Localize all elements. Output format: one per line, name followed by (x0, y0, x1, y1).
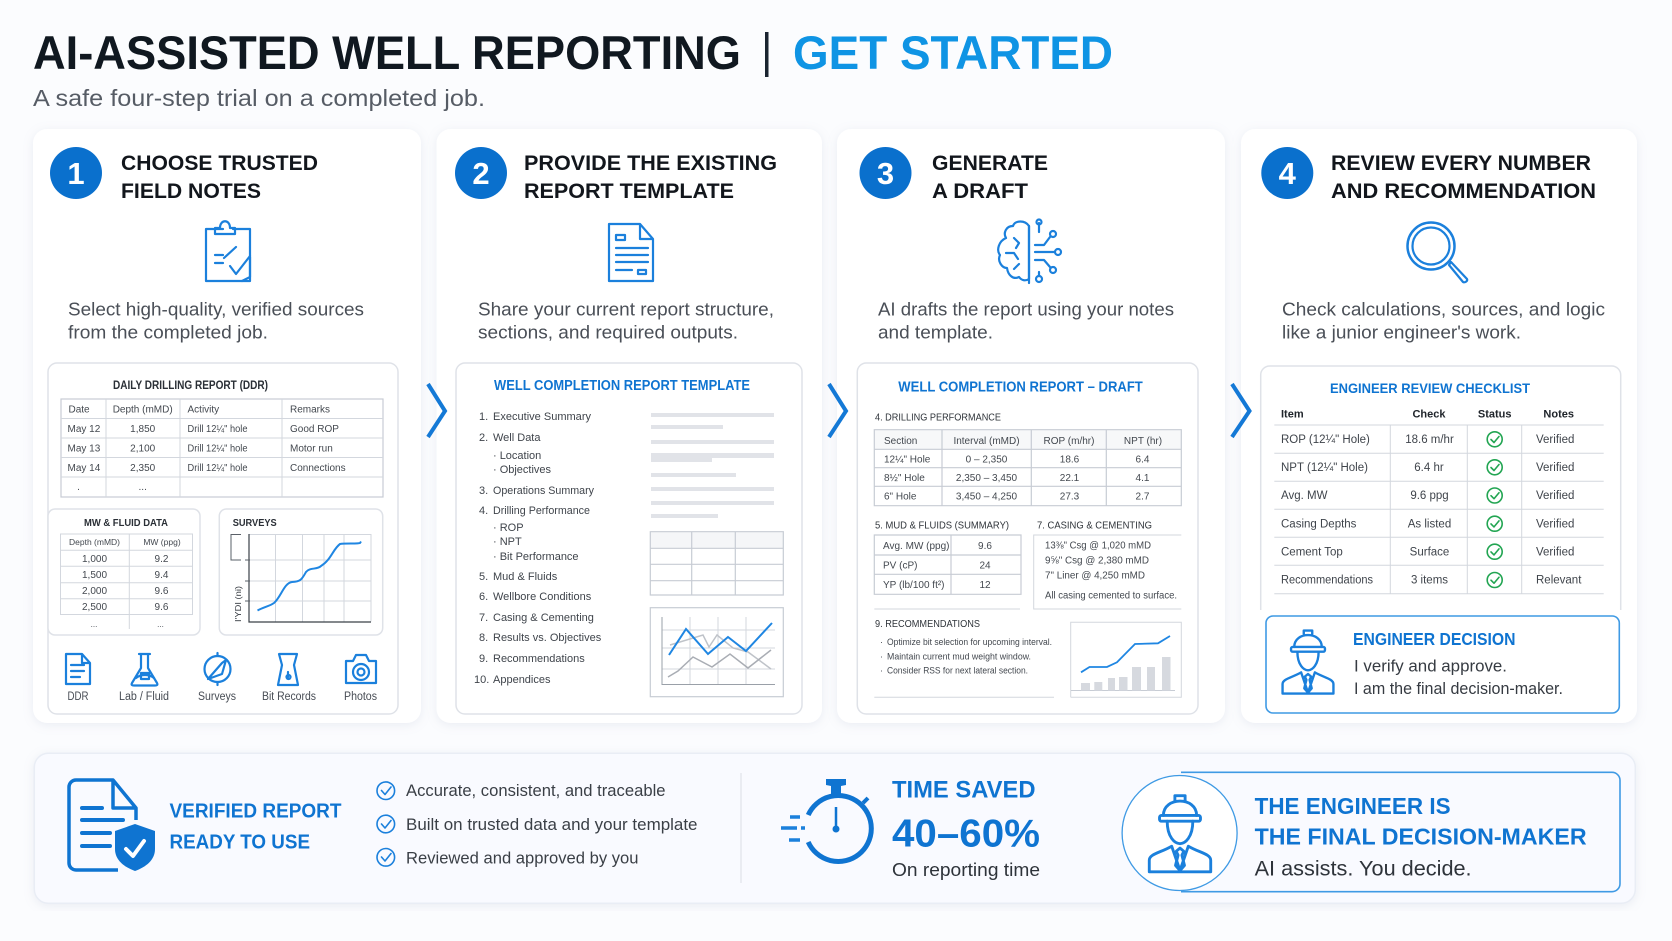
arrow: step 2 to 3 (829, 384, 846, 437)
heading: step 2: REPORT TEMPLATE (524, 179, 734, 203)
text: template outline: Operations Summary (493, 485, 594, 497)
text: step 1 description: from the completed job. (68, 323, 268, 343)
stat: time saved: TIME SAVED (892, 776, 1036, 803)
table: checklist: Check (1412, 409, 1446, 421)
table: daily drilling report: Drill 12¼" hole (188, 423, 248, 435)
table: drilling performance: Section (884, 436, 917, 447)
table: drilling performance: 22.1 (1060, 473, 1080, 484)
table: checklist: Cement Top (1281, 546, 1343, 558)
table: checklist: 18.6 m/hr (1405, 434, 1454, 446)
arrow: step 3 to 4 (1232, 384, 1250, 437)
text: template outline: Location (500, 450, 541, 462)
placeholder text lines (651, 413, 774, 518)
table: drilling performance: 6" Hole (884, 492, 917, 502)
table: mud and fluids: 9.6 (978, 541, 992, 552)
text: template outline: 1. (479, 411, 488, 423)
icons: green status checks (1487, 432, 1502, 588)
icon: engineer (1283, 631, 1333, 694)
table: daily drilling report: Connections (290, 463, 346, 474)
text: casing and cementing: All casing cemented to surface. (1045, 590, 1177, 601)
table: daily drilling report: 2,100 (130, 444, 156, 454)
placeholder line chart (650, 608, 783, 697)
table: checklist: NPT (12¼" Hole) (1281, 462, 1368, 474)
text: step 4 description: Check calculations, sources, and logic (1282, 300, 1605, 320)
table: drilling performance: 18.6 (1060, 454, 1080, 466)
text: casing and cementing: 7. CASING & CEMENTING (1037, 519, 1152, 531)
text: recommendations: Consider RSS for next lateral section. (887, 666, 1028, 676)
table: drilling performance: 6.4 (1136, 454, 1150, 466)
table: MW and fluid data: 2,000 (82, 586, 107, 597)
table: drilling performance (874, 412, 1181, 506)
callout: the engineer is the final decision-maker: THE ENGINEER IS (1255, 793, 1451, 819)
table: checklist: Verified (1536, 518, 1574, 530)
table: daily drilling report: Motor run (290, 444, 333, 454)
text: template outline: 2. (479, 432, 488, 444)
text: template outline: Bit Performance (500, 551, 579, 563)
table: daily drilling report: Drill 12¼" hole (188, 442, 248, 454)
step number 2: 2 (472, 156, 490, 191)
panel: bottom summary (34, 753, 1635, 903)
table: mud and fluids: Avg. MW (ppg) (883, 541, 950, 552)
icon: lab flask (132, 654, 157, 686)
icon labels: Bit Records (262, 691, 316, 703)
table: MW and fluid data: Depth (mMD) (69, 537, 120, 547)
table: drilling performance: 8½" Hole (884, 473, 925, 484)
stat: time saved (892, 776, 1040, 880)
icon: magnifying glass (1408, 222, 1467, 282)
table: checklist: Recommendations (1281, 575, 1373, 587)
icon: camera (346, 655, 376, 683)
callout: the engineer is the final decision-maker: AI assists. You decide. (1255, 857, 1472, 880)
table: checklist: Surface (1410, 546, 1449, 558)
table: daily drilling report: May 12 (68, 424, 101, 435)
callout: engineer decision (1266, 616, 1619, 713)
text: template outline: · (493, 450, 497, 462)
text: verified report ready to use: VERIFIED REPORT (170, 800, 342, 822)
text: step 3 description (878, 300, 1174, 343)
table: daily drilling report: Activity (188, 404, 219, 416)
text: casing and cementing: 7" Liner @ 4,250 mMD (1045, 570, 1145, 581)
table: checklist: Verified (1536, 546, 1574, 558)
table: drilling performance: 27.3 (1060, 492, 1080, 502)
text: template outline: · (493, 536, 497, 548)
table: drilling performance: 2,350 – 3,450 (956, 473, 1018, 484)
heading: step 4: AND RECOMMENDATION (1331, 179, 1596, 203)
text: template outline: 8. (479, 632, 488, 644)
icon: bit records (278, 654, 298, 685)
placeholder table (650, 532, 783, 595)
chart: performance trend (1071, 622, 1181, 697)
icon: DDR document (66, 654, 90, 684)
list: verification checks: Accurate, consistent, and traceable (406, 781, 666, 800)
text: recommendations: 9. RECOMMENDATIONS (875, 618, 980, 630)
step number 1: 1 (67, 156, 85, 191)
table: daily drilling report (61, 380, 383, 497)
text: recommendations: Maintain current mud weight window. (887, 651, 1031, 661)
list: verification checks (377, 781, 698, 867)
table: mud and fluids: YP (lb/100 ft²) (883, 580, 945, 591)
heading: step 1 (121, 151, 318, 203)
table: mud and fluids: PV (cP) (883, 560, 917, 572)
text: casing and cementing (1034, 519, 1181, 609)
text: step 3 description: AI drafts the report using your notes (878, 300, 1174, 320)
table: daily drilling report: Drill 12¼" hole (188, 462, 248, 474)
step number 2 (455, 147, 507, 199)
arrow: step 1 to 2 (428, 384, 445, 437)
table: MW and fluid data: MW (ppg) (143, 537, 181, 547)
text: step 2 description: sections, and required outputs. (478, 323, 738, 343)
heading: step 1: FIELD NOTES (121, 179, 261, 203)
table: checklist: 6.4 hr (1414, 462, 1444, 474)
text: template outline: Recommendations (493, 653, 585, 665)
table: daily drilling report: 2,350 (130, 463, 156, 474)
heading: step 3: A DRAFT (932, 179, 1028, 203)
chart: surveys: SURVEYS (233, 518, 277, 529)
panel: draft report (857, 363, 1198, 714)
step number 1 (50, 147, 102, 199)
text: step 4 description (1282, 300, 1605, 343)
text: template outline: Appendices (493, 674, 551, 686)
icon: clipboard (206, 221, 250, 281)
table: checklist: Relevant (1536, 575, 1582, 587)
subtitle: A safe four-step trial on a completed job. (33, 85, 485, 111)
heading: template title: WELL COMPLETION REPORT TEMPLATE (494, 378, 750, 394)
table: MW and fluid data (48, 509, 200, 635)
table: checklist: As listed (1408, 518, 1451, 530)
table: checklist: Casing Depths (1281, 518, 1357, 530)
text: recommendations: · (880, 666, 883, 676)
callout: the engineer is the final decision-maker: THE FINAL DECISION-MAKER (1255, 824, 1587, 850)
text: template outline: NPT (500, 536, 522, 548)
table: checklist: Status (1478, 409, 1512, 421)
heading: draft title: WELL COMPLETION REPORT – DRAFT (898, 380, 1143, 396)
table: daily drilling report: 1,850 (130, 424, 156, 435)
text: template outline: 9. (479, 653, 488, 665)
table: MW and fluid data: 9.6 (155, 586, 169, 597)
table: drilling performance: Interval (mMD) (953, 436, 1020, 447)
panel: step 2 provide the existing report template (436, 129, 822, 723)
icon: compass (204, 653, 230, 685)
text: recommendations (874, 618, 1054, 697)
title (33, 26, 1113, 79)
text: template outline: 10. (474, 674, 489, 686)
heading: step 2 (524, 151, 777, 203)
table: daily drilling report: . (77, 482, 80, 493)
text: template outline: ROP (500, 522, 524, 534)
heading: checklist title: ENGINEER REVIEW CHECKLIST (1330, 380, 1530, 396)
title: GET STARTED (793, 26, 1113, 79)
heading: step 3 (932, 151, 1048, 203)
table: MW and fluid data: 9.2 (155, 554, 169, 565)
list: verification checks: Built on trusted data and your template (406, 815, 698, 834)
table: MW and fluid data: MW & FLUID DATA (84, 518, 168, 529)
heading: step 3: GENERATE (932, 151, 1048, 175)
table: daily drilling report: DAILY DRILLING REPORT (DDR) (113, 380, 268, 392)
table: mud and fluids (874, 519, 1021, 609)
table: MW and fluid data: 9.6 (155, 602, 169, 613)
table: MW and fluid data: 2,500 (82, 602, 107, 613)
step number 3 (860, 147, 912, 199)
text: template outline: 4. (479, 505, 488, 517)
table: MW and fluid data: ... (91, 620, 97, 629)
text: recommendations: · (880, 651, 883, 661)
text: step 3 description: and template. (878, 323, 993, 343)
icon labels: Lab / Fluid (119, 691, 169, 703)
text: step 4 description: like a junior engineer's work. (1282, 323, 1521, 343)
panel: step 3 generate a draft (837, 129, 1225, 723)
text: template outline: 7. (479, 612, 488, 624)
chart: surveys: I'YDI (ni) (233, 586, 243, 622)
table: checklist: Notes (1543, 409, 1574, 421)
icon: AI brain (998, 220, 1061, 283)
text: recommendations: Optimize bit selection for upcoming interval. (887, 637, 1052, 647)
step number 3: 3 (877, 156, 894, 191)
icon: stopwatch (781, 779, 871, 862)
callout: engineer decision: ENGINEER DECISION (1353, 629, 1516, 649)
table: daily drilling report: May 14 (68, 463, 101, 474)
text: verified report ready to use: READY TO USE (170, 831, 310, 853)
table: drilling performance: 4.1 (1136, 473, 1150, 484)
table: MW and fluid data: 1,500 (82, 570, 107, 581)
table: daily drilling report: ... (139, 482, 147, 493)
stat: time saved: 40–60% (892, 813, 1040, 856)
table: drilling performance: 12¼" Hole (884, 454, 931, 466)
callout: the engineer is the final decision-maker (1122, 772, 1620, 892)
panel: report template (456, 363, 802, 714)
text: template outline: 5. (479, 571, 488, 583)
text: template outline: Casing & Cementing (493, 612, 594, 624)
text: casing and cementing: 13⅜" Csg @ 1,020 mMD (1045, 540, 1151, 551)
table: MW and fluid data: ... (157, 620, 164, 629)
table: daily drilling report: Date (68, 404, 90, 416)
icon labels: DDR (68, 691, 88, 703)
text: verified report ready to use (170, 800, 342, 853)
table: daily drilling report: Depth (mMD) (113, 404, 173, 416)
text: template outline: Mud & Fluids (493, 571, 558, 583)
icon: engineer (1149, 796, 1211, 872)
table: checklist (1274, 409, 1604, 594)
text: step 2 description: Share your current report structure, (478, 300, 774, 320)
table: checklist: Avg. MW (1281, 490, 1328, 502)
table: checklist: Verified (1536, 490, 1574, 502)
panel: step 1 choose trusted field notes (33, 129, 421, 723)
text: step 1 description: Select high-quality, verified sources (68, 300, 364, 320)
table: checklist: Verified (1536, 434, 1574, 446)
heading: step 4 (1331, 151, 1596, 203)
table: daily drilling report: May 13 (68, 444, 101, 454)
table: mud and fluids: 12 (979, 580, 991, 591)
text: template outline: · (493, 464, 497, 476)
table: drilling performance: 2.7 (1136, 492, 1150, 502)
table: mud and fluids: 5. MUD & FLUIDS (SUMMARY) (875, 519, 1009, 531)
text: template outline: · (493, 522, 497, 534)
text: template outline: Well Data (493, 432, 541, 444)
table: checklist: Verified (1536, 462, 1574, 474)
icon labels: Photos (344, 691, 377, 703)
table: drilling performance: ROP (m/hr) (1044, 436, 1094, 447)
table: checklist: 9.6 ppg (1410, 490, 1449, 502)
text: template outline: Wellbore Conditions (493, 591, 592, 603)
list: verification checks: Reviewed and approved by you (406, 848, 638, 867)
table: checklist: Item (1281, 409, 1304, 421)
table: checklist: 3 items (1411, 575, 1448, 587)
text: template outline: Results vs. Objectives (493, 632, 602, 644)
text: template outline: Executive Summary (493, 411, 591, 423)
table: MW and fluid data: 9.4 (155, 570, 169, 581)
chart: surveys (219, 509, 383, 635)
icon: verified report (69, 780, 155, 871)
stat: time saved: On reporting time (892, 859, 1040, 880)
icon labels (68, 691, 377, 703)
heading: step 4: REVIEW EVERY NUMBER (1331, 151, 1591, 175)
text: template outline: 6. (479, 591, 488, 603)
table: drilling performance: 4. DRILLING PERFORMANCE (875, 412, 1001, 424)
icon labels: Surveys (198, 691, 236, 703)
panel: review checklist (1261, 366, 1621, 610)
title: AI-ASSISTED WELL REPORTING (33, 26, 741, 79)
heading: step 2: PROVIDE THE EXISTING (524, 151, 777, 175)
panel: step 4 review every number and recommendation (1241, 129, 1637, 723)
text: template outline (474, 411, 602, 686)
table: daily drilling report: Good ROP (290, 424, 339, 435)
text: recommendations: · (880, 637, 883, 647)
table: MW and fluid data: 1,000 (82, 554, 107, 565)
icon: document (609, 224, 653, 281)
callout: engineer decision: I am the final decision-maker. (1354, 679, 1563, 698)
text: template outline: 3. (479, 485, 488, 497)
step number 4: 4 (1279, 156, 1297, 191)
table: checklist: ROP (12¼" Hole) (1281, 434, 1370, 446)
table: drilling performance: 3,450 – 4,250 (956, 492, 1018, 502)
text: step 1 description (68, 300, 364, 343)
table: drilling performance: 0 – 2,350 (966, 454, 1008, 466)
text: template outline: Drilling Performance (493, 505, 590, 517)
text: step 2 description (478, 300, 774, 343)
text: casing and cementing: 9⅝" Csg @ 2,380 mMD (1045, 555, 1149, 566)
table: drilling performance: NPT (hr) (1124, 436, 1162, 447)
step number 4 (1261, 147, 1313, 199)
table: daily drilling report: Remarks (290, 404, 330, 416)
table: mud and fluids: 24 (979, 560, 991, 572)
text: template outline: · (493, 551, 497, 563)
callout: engineer decision: I verify and approve. (1354, 657, 1507, 676)
heading: step 1: CHOOSE TRUSTED (121, 151, 318, 175)
text: template outline: Objectives (500, 464, 552, 476)
panel: source documents (48, 363, 398, 714)
